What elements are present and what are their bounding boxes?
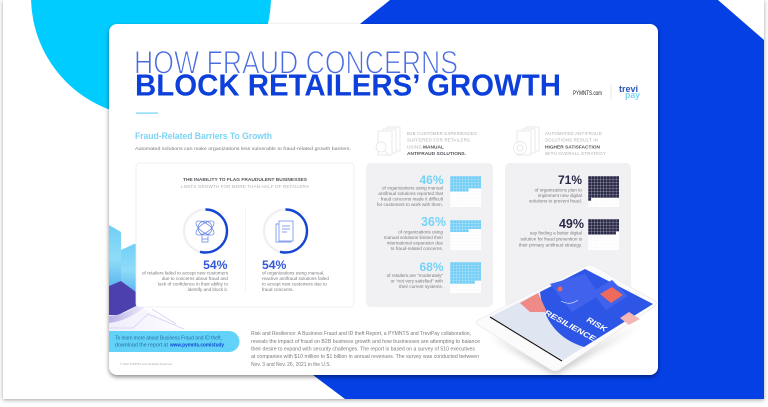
copyright: © 2022 PYMNTS.com All Rights Reserved — [120, 362, 172, 366]
report description: reveals the impact of fraud on B2B business growth and how businesses are attempting to balance — [251, 339, 480, 345]
stat: 54% organizations: to accept new customers due to — [262, 282, 327, 286]
stat: 68%: or “not very satisfied” with — [391, 278, 443, 284]
stat: 36%: international expansion due — [387, 240, 443, 246]
report description: Risk and Resilience: A Business Fraud and ID theft Report, a PYMNTS and TreviPay collaboration, — [251, 331, 471, 337]
column heading: automated: HIGHER SATISFACTION — [545, 144, 600, 150]
logo: TreviPay: trevi — [619, 84, 638, 95]
panel heading: THE INABILITY TO FLAG FRAUDULENT BUSINESSES — [183, 177, 307, 182]
column heading: automated: SOLUTIONS RESULT IN — [545, 138, 598, 142]
donut: 54% retailers — [184, 210, 227, 252]
stat: 54% organizations: fraud concerns. — [262, 287, 294, 292]
stat: 46% — [377, 173, 444, 207]
title: HOW FRAUD CONCERNS — [134, 44, 458, 80]
stat: 46%: antifraud solutions reported that — [378, 191, 444, 196]
stat: 54% retailers: 54% — [203, 258, 228, 272]
title — [134, 44, 561, 102]
stat: 54% organizations: of organizations using manual, — [262, 270, 324, 276]
accent line — [136, 112, 158, 114]
waffle chart: 36% — [450, 220, 481, 250]
report description — [251, 331, 480, 368]
tablet shadow — [490, 325, 640, 374]
panel: inability to flag — [136, 163, 354, 307]
stat: 46%: for customers to work with them. — [377, 202, 443, 207]
illustration: isometric buildings — [109, 225, 190, 331]
screen edge — [490, 317, 562, 361]
icon: documents with magnifier — [376, 127, 400, 155]
background cyan circle — [31, 0, 271, 117]
icon: documents with target — [514, 127, 539, 155]
callout: learn more — [109, 331, 240, 352]
stat: 54% organizations: 54% — [262, 258, 287, 272]
column heading: automated: AUTOMATED ANTIFRAUD — [545, 131, 603, 136]
column heading: manual: B2B CUSTOMER EXPERIENCES — [407, 131, 477, 136]
column heading: manual: MANUAL — [423, 144, 444, 150]
waffle chart: 46% — [450, 176, 481, 207]
tablet body — [476, 265, 656, 371]
stat: 71%: 71% — [558, 173, 582, 187]
report description: at companies with $10 million to $1 billion in annual revenues. The survey was conducted between — [251, 354, 479, 360]
divider — [244, 208, 247, 292]
column heading: manual — [407, 131, 477, 156]
section intro: Automated solutions can make organizations less vulnerable to fraud-related growth barriers. — [135, 146, 351, 151]
panel heading: LIMITS GROWTH FOR MORE THAN HALF OF RETAILERS — [181, 184, 309, 189]
stat: 49%: solution for fraud prevention is — [520, 236, 583, 242]
stat: 46%: fraud concerns made it difficult — [381, 196, 444, 202]
stat: 49%: their primary antifraud strategy. — [519, 242, 582, 248]
stat: 36%: of organizations using — [398, 230, 443, 234]
cover title — [543, 308, 609, 344]
column heading: manual: USING — [407, 144, 422, 150]
title: BLOCK RETAILERS’ GROWTH — [135, 68, 561, 102]
report description: their desire to expand with security challenges. The report is based on a survey of 510 executives — [251, 346, 475, 352]
stat: 54% organizations — [262, 258, 329, 292]
main card — [109, 24, 658, 377]
cover title: RESILIENCE — [543, 308, 598, 344]
stat: 54% retailers: of retailers failed to accept new customers — [142, 270, 229, 276]
tablet mockup — [476, 265, 656, 374]
stat: 54% retailers: identify and block it. — [188, 287, 228, 292]
icon: head with orbits — [194, 218, 216, 242]
stat: 46%: 46% — [419, 173, 444, 187]
report description: Nov. 3 and Nov. 26, 2021 in the U.S. — [251, 362, 331, 368]
panel: manual antifraud stats — [366, 163, 493, 307]
callout: learn more: www.pymnts.com/study — [169, 342, 224, 348]
donut: 54% organizations — [264, 210, 307, 252]
stat: 54% organizations: reactive antifraud solutions failed — [262, 276, 329, 281]
column heading: automated — [545, 131, 606, 156]
stat: 36%: to fraud-related concerns. — [391, 246, 443, 251]
stat: 46%: of organizations using manual — [382, 186, 443, 190]
cover title: RISK — [585, 315, 609, 334]
logo: TreviPay: pay — [625, 90, 640, 100]
stat: 71% — [529, 173, 582, 204]
section heading: Fraud-Related Barriers To Growth — [135, 131, 272, 141]
stat: 49% — [519, 217, 584, 248]
waffle chart: 49% — [588, 219, 619, 250]
stat: 49%: 49% — [559, 217, 584, 231]
waffle chart: 68% — [450, 262, 481, 293]
callout: learn more: download the report at — [115, 342, 169, 348]
callout: learn more: To learn more about Business Fraud and ID theft, — [115, 336, 222, 342]
stat: 36%: manual solutions limited their — [384, 235, 443, 240]
stat: 49%: say finding a better digital — [530, 230, 582, 236]
stat: 54% retailers — [142, 258, 229, 292]
background blue circle — [291, 0, 764, 399]
logo: PYMNTS: PYMNTS.com — [573, 90, 602, 97]
cover artwork — [540, 269, 653, 347]
stat: 71%: implement new digital — [538, 193, 582, 198]
column heading: automated: WITH OVERALL STRATEGY — [545, 151, 606, 156]
stat: 68%: their current systems. — [399, 284, 443, 289]
icon: document — [276, 221, 293, 242]
stat: 54% retailers: lack of confidence in their ability to — [158, 282, 228, 286]
waffle chart: 71% — [588, 176, 619, 207]
logo: TreviPay — [610, 84, 640, 100]
stat: 36%: 36% — [421, 215, 446, 229]
panel heading — [181, 177, 309, 189]
stat: 71%: solutions to prevent fraud. — [529, 198, 582, 204]
stat: 71%: of organizations plan to — [534, 188, 582, 192]
column heading: manual: SUFFERED FOR RETAILERS — [407, 138, 470, 142]
column heading: manual: ANTIFRAUD SOLUTIONS. — [407, 151, 466, 156]
panel: automated antifraud stats — [505, 163, 631, 307]
stat: 36% — [384, 215, 446, 251]
stat: 68% — [387, 260, 444, 289]
stat: 68%: 68% — [419, 260, 444, 274]
tablet screen — [490, 269, 653, 360]
stat: 68%: of retailers are “moderately” — [387, 273, 443, 278]
stat: 54% retailers: due to concerns about fraud and — [162, 276, 228, 281]
